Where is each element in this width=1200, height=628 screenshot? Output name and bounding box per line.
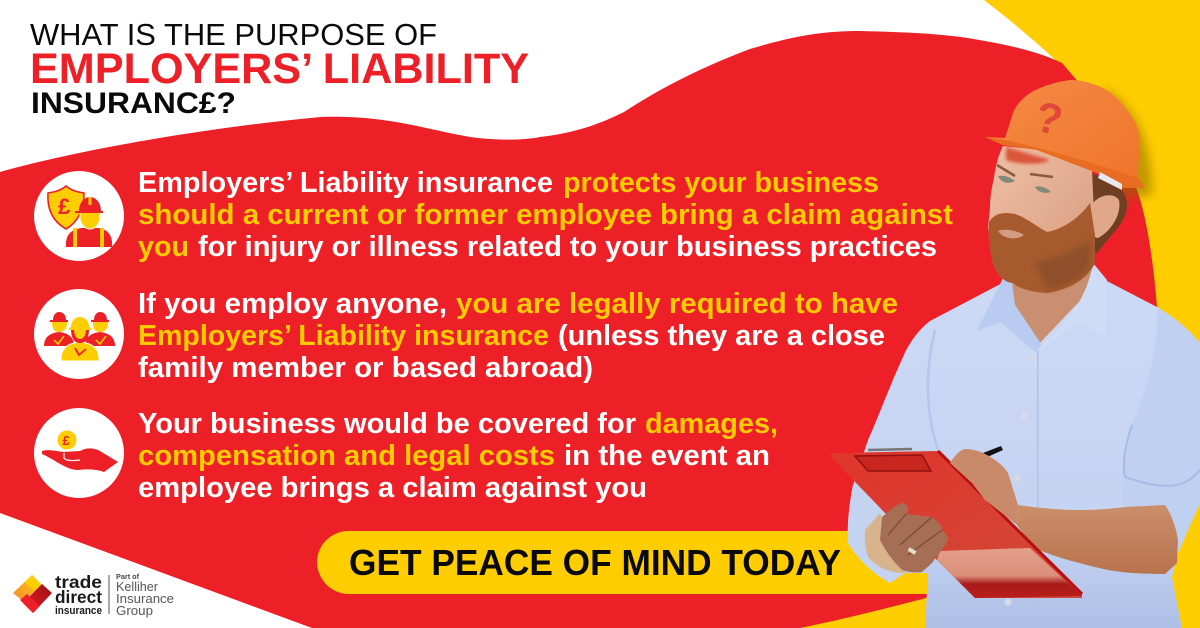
man: lips xyxy=(998,230,1024,238)
man: left wrist xyxy=(865,513,905,573)
man: clipboard edge xyxy=(938,451,1082,594)
text block 2: you are legally required to have xyxy=(456,288,898,320)
man: writing hand xyxy=(950,449,1018,525)
man: left hand xyxy=(880,503,948,572)
text block 1: you xyxy=(138,231,189,263)
man: collar xyxy=(977,278,1042,352)
text block 3: in the event an xyxy=(564,440,770,472)
man: shirt xyxy=(848,263,1200,628)
man: finger lines xyxy=(888,514,942,555)
man: ear xyxy=(1090,195,1119,238)
text block 3: employee brings a claim against you xyxy=(138,472,647,504)
man: pen xyxy=(983,446,1003,458)
text block 1 xyxy=(138,167,953,263)
icon: three workers xyxy=(34,289,124,379)
text block 3 xyxy=(138,408,778,504)
man: forearm xyxy=(1017,505,1178,574)
call to action button: GET PEACE OF MIND TODAY xyxy=(349,542,841,583)
man: clipboard lower reflective panel xyxy=(937,548,1082,598)
text block 2: (unless they are a close xyxy=(558,320,885,352)
man: clipboard xyxy=(831,451,1082,598)
man: left sleeve fold xyxy=(928,330,938,450)
logo: trade direct insurance: insurance xyxy=(55,605,102,617)
logo: trade direct insurance xyxy=(13,572,174,618)
man: face xyxy=(988,146,1095,283)
text block 2: If you employ anyone, xyxy=(138,288,447,320)
man: helmet shadow xyxy=(1100,88,1152,200)
text block 2 xyxy=(138,288,898,384)
logo: trade direct insurance: Part of xyxy=(116,572,139,581)
man: right sleeve fold xyxy=(1124,425,1200,486)
logo: trade direct insurance: trade xyxy=(55,572,102,592)
call to action button xyxy=(317,531,930,594)
title xyxy=(30,17,529,120)
title: INSURANC£? xyxy=(31,87,236,120)
text block 2: family member or based abroad) xyxy=(138,352,593,384)
man: clip plate xyxy=(855,455,931,471)
icon: shield and worker xyxy=(34,171,124,261)
man in hard hat with clipboard xyxy=(831,80,1200,628)
title: WHAT IS THE PURPOSE OF xyxy=(30,17,437,52)
text block 1: for injury or illness related to your business practices xyxy=(198,231,937,263)
logo: trade direct insurance: Group xyxy=(116,604,153,618)
text block 1: protects your business xyxy=(563,167,879,199)
logo: trade direct insurance: direct xyxy=(55,587,102,607)
text block 1: Employers’ Liability insurance xyxy=(138,167,553,199)
icon: hand with pound coin xyxy=(34,408,124,498)
logo: trade direct insurance: Kelliher xyxy=(116,580,158,594)
icon: shield and worker: £ xyxy=(58,194,71,219)
man: hard hat xyxy=(985,80,1145,188)
man: forehead reflection xyxy=(1006,147,1050,164)
text block 3: compensation and legal costs xyxy=(138,440,555,472)
text block 1: should a current or former employee bring a claim against xyxy=(138,199,953,231)
man: right sleeve shading xyxy=(1122,307,1200,553)
man: eyebrows xyxy=(997,165,1053,177)
man: helmet brim xyxy=(985,137,1145,188)
man: helmet strap xyxy=(1098,172,1122,190)
man: beard xyxy=(989,203,1095,293)
man: metal clip xyxy=(868,449,912,450)
text block 3: Your business would be covered for xyxy=(138,408,636,440)
logo: trade direct insurance: Insurance xyxy=(116,592,174,606)
icon: hand with pound coin: £ xyxy=(62,433,70,448)
man: buttons xyxy=(1004,355,1036,606)
man: left sleeve cuff xyxy=(848,485,905,583)
text block 2: Employers’ Liability insurance xyxy=(138,320,549,352)
man: ring xyxy=(908,547,916,555)
man: hair xyxy=(1083,170,1127,254)
yellow background shape xyxy=(780,0,1200,628)
man: placket xyxy=(1037,350,1038,628)
man: lower beard shadow xyxy=(1035,240,1090,289)
title: EMPLOYERS’ LIABILITY xyxy=(30,45,529,93)
man: question mark: ? xyxy=(1031,93,1067,145)
man: eyes xyxy=(998,176,1015,183)
text block 3: damages, xyxy=(645,408,778,440)
man: neck xyxy=(1010,258,1095,346)
